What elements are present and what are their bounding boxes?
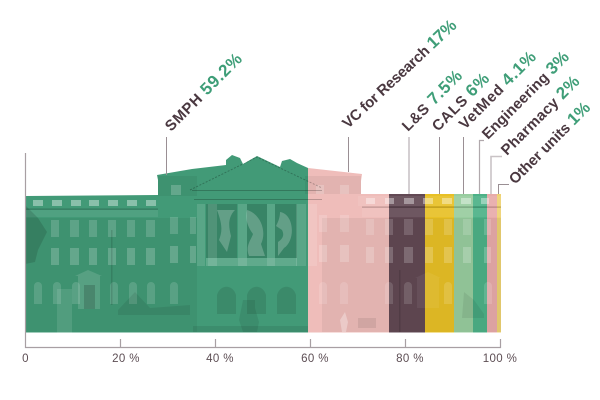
band: L&S 7.5% <box>389 194 425 332</box>
axis labels: 40 % <box>206 353 234 365</box>
axis labels: 80 % <box>396 353 424 365</box>
label: Other units 1%: Other units 1% <box>504 98 594 188</box>
label: CALS 6%: CALS 6% <box>427 69 493 135</box>
axis labels: 0 <box>22 353 29 365</box>
axis: baseline and ticks <box>26 153 500 348</box>
axis labels: 100 % <box>483 353 517 365</box>
axis labels: 20 % <box>112 353 140 365</box>
label: VC for Research 17%: VC for Research 17% <box>338 16 460 132</box>
band: CALS 6% <box>425 194 454 332</box>
leader lines <box>166 137 509 194</box>
stacked bands clipped to building silhouette <box>25 150 501 335</box>
band: Other units 1% <box>497 194 501 332</box>
band: Engineering 3% <box>473 194 487 332</box>
label: VetMed 4.1%: VetMed 4.1% <box>454 47 540 133</box>
label: L&S 7.5%: L&S 7.5% <box>397 66 466 135</box>
label: Engineering 3%: Engineering 3% <box>477 47 573 143</box>
building photo texture overlay <box>25 157 501 333</box>
band: SMPH 59.2% <box>25 150 308 335</box>
label: SMPH 59.2%: SMPH 59.2% <box>160 49 246 135</box>
axis labels <box>22 353 517 365</box>
chart: building share bars <box>25 150 501 335</box>
band: Pharmacy 2% <box>487 194 497 332</box>
band: VC for Research 17% <box>308 168 389 332</box>
label: Pharmacy 2%: Pharmacy 2% <box>496 72 583 159</box>
axis labels: 60 % <box>301 353 329 365</box>
band: VetMed 4.1% <box>454 194 473 332</box>
